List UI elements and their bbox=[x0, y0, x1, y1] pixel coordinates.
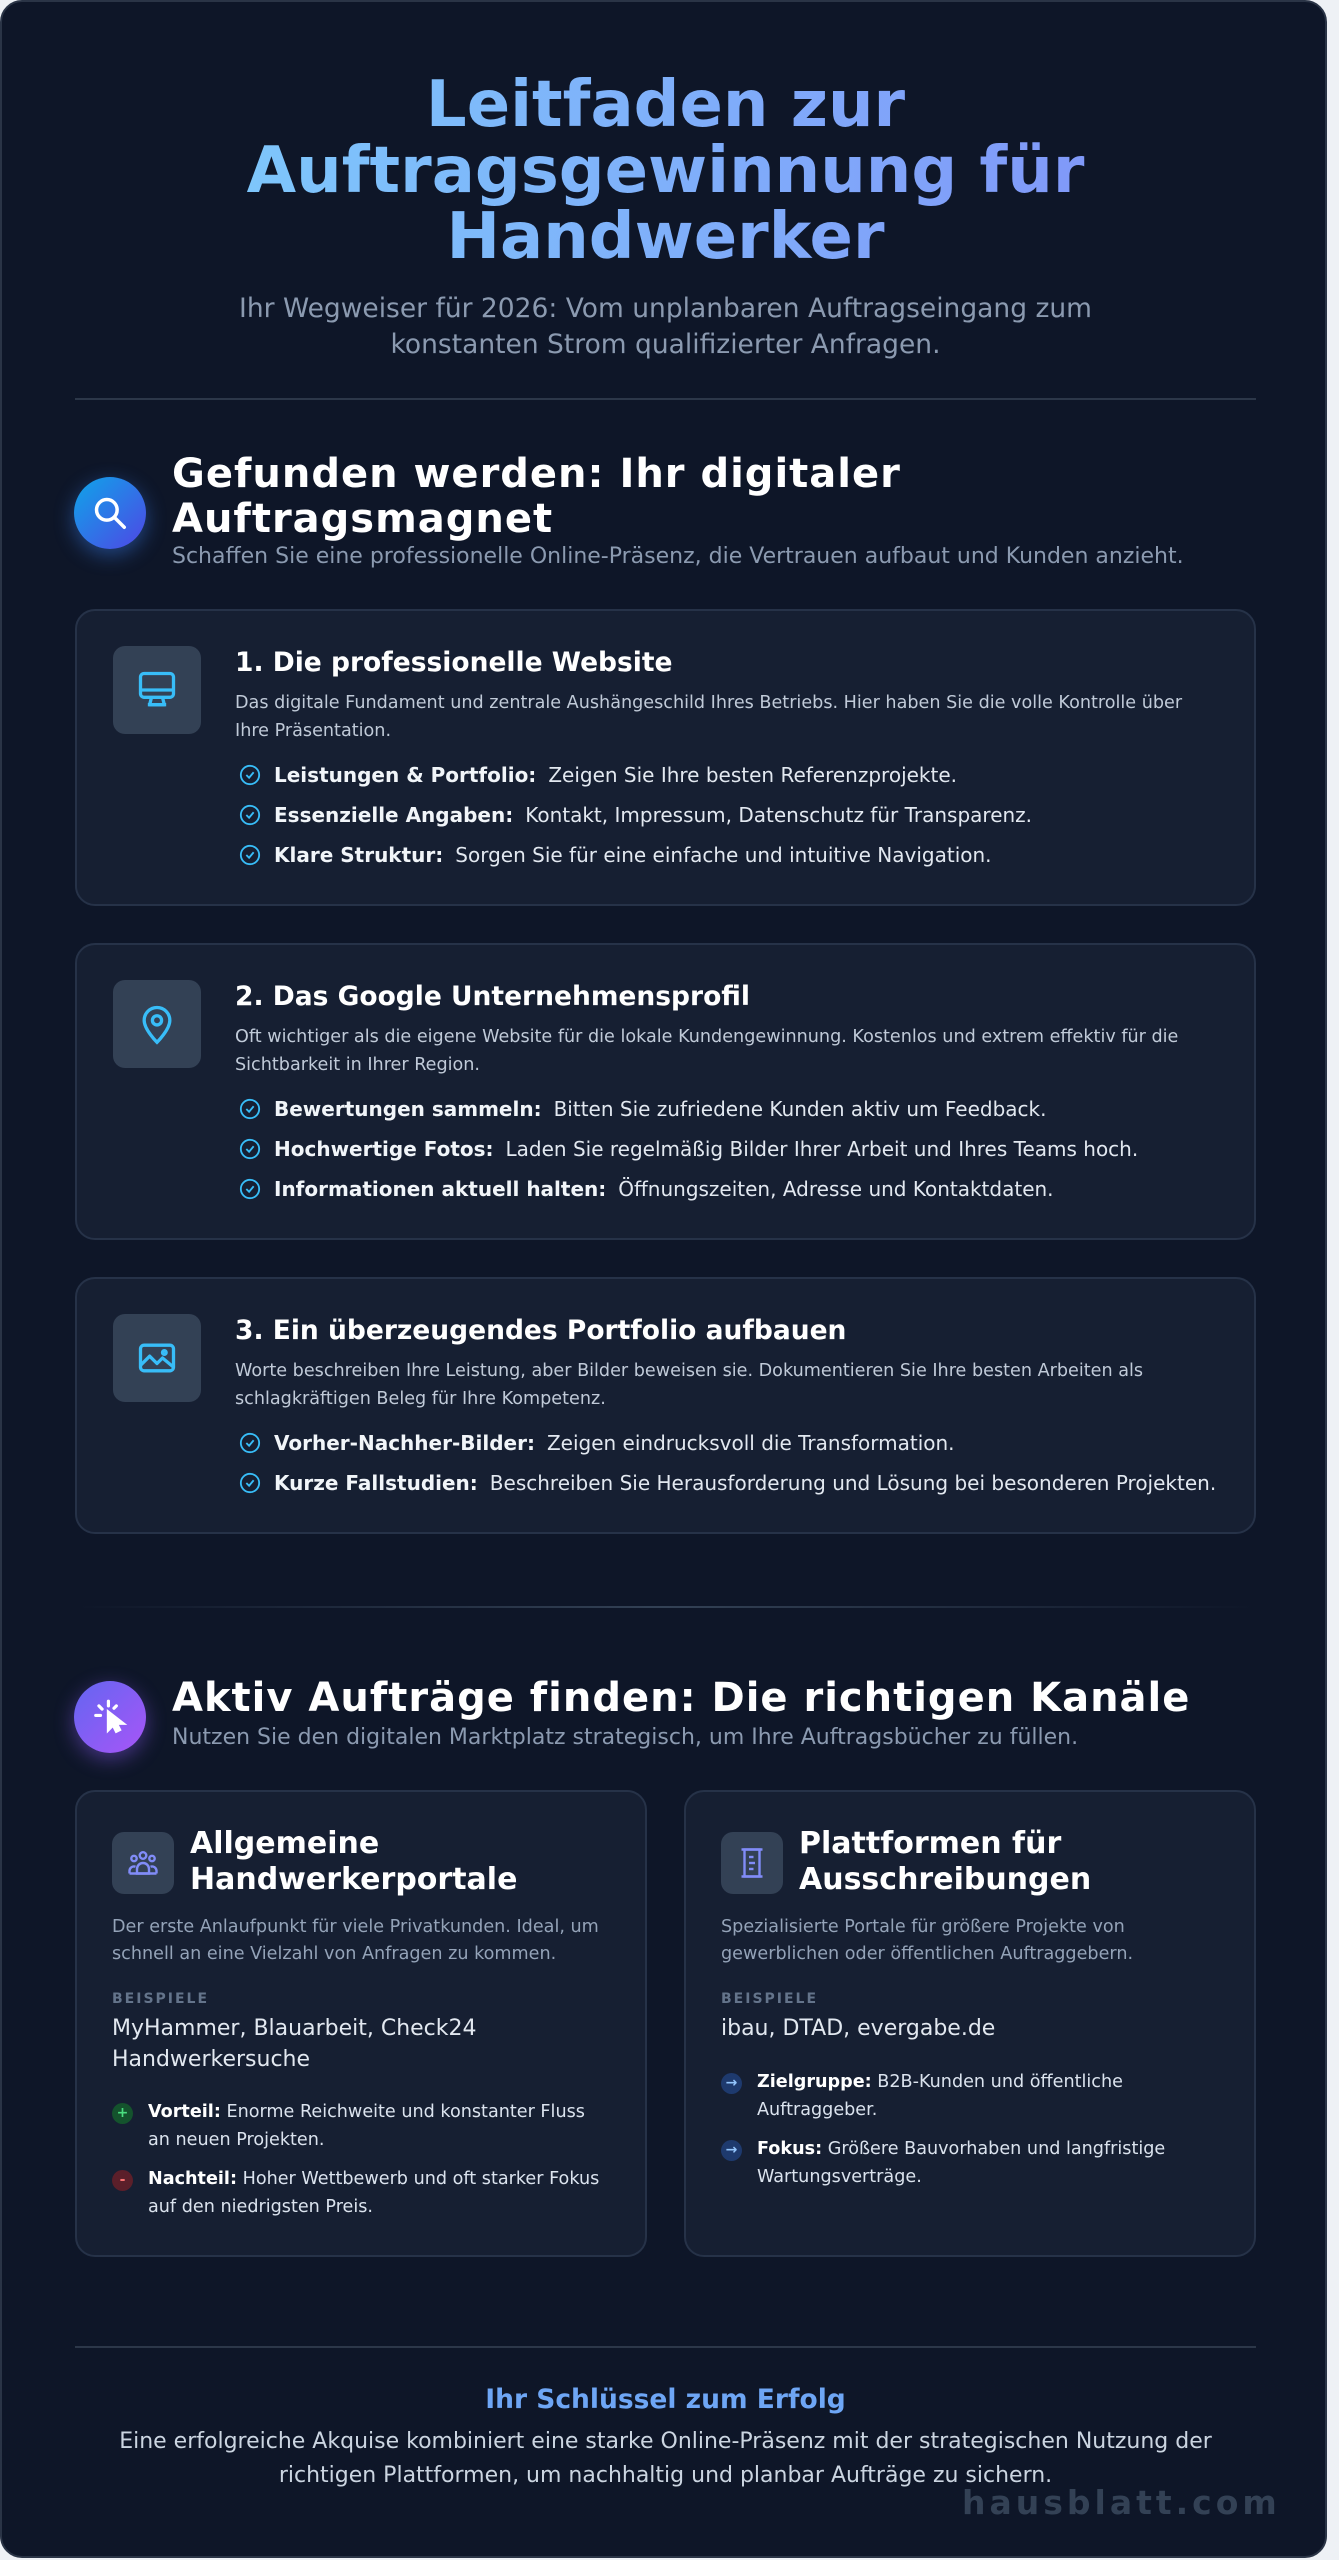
section subtitle 2: Nutzen Sie den digitalen Marktplatz strategisch, um Ihre Auftragsbücher zu füllen. bbox=[172, 1725, 1078, 1750]
bullet list bbox=[240, 1431, 1216, 1495]
examples bbox=[112, 1991, 477, 2072]
card description: Das digitale Fundament und zentrale Aushängeschild Ihres Betriebs. Hier haben Sie die volle Kontrolle über Ihre Präsentation. bbox=[235, 693, 1182, 741]
examples bbox=[721, 1991, 995, 2041]
bullet list: Laden Sie regelmäßig Bilder Ihrer Arbeit und Ihres Teams hoch. bbox=[506, 1137, 1138, 1161]
icon: monitor bbox=[113, 646, 201, 734]
card title: 2. Das Google Unternehmensprofil bbox=[235, 981, 750, 1012]
bullet list: Zeigen Sie Ihre besten Referenzprojekte. bbox=[548, 763, 957, 787]
card title: Allgemeine bbox=[190, 1826, 379, 1861]
title bbox=[2, 72, 1329, 270]
pros and cons bbox=[112, 2102, 599, 2217]
examples: BEISPIELE bbox=[721, 1991, 818, 2007]
bullet list: Kontakt, Impressum, Datenschutz für Transparenz. bbox=[525, 803, 1032, 827]
card description: Oft wichtiger als die eigene Website für die lokale Kundengewinnung. Kostenlos und extrem effektiv für die Sichtbarkeit in Ihrer Region. bbox=[235, 1027, 1178, 1075]
examples: Handwerkersuche bbox=[112, 2047, 310, 2072]
icon: users bbox=[112, 1832, 174, 1894]
panel: ausschreibungen bbox=[684, 1790, 1256, 2257]
details: → bbox=[726, 2075, 737, 2091]
icon: document bbox=[721, 1832, 783, 1894]
card title: 1. Die professionelle Website bbox=[235, 647, 673, 678]
bullet list: Kurze Fallstudien: bbox=[274, 1471, 478, 1495]
card title: Ausschreibungen bbox=[799, 1862, 1091, 1897]
card title bbox=[799, 1826, 1091, 1897]
footer text: Eine erfolgreiche Akquise kombiniert eine starke Online-Präsenz mit der strategischen Nutzung der richtigen Plattformen, um nachhaltig und planbar Aufträge zu sichern. bbox=[119, 2429, 1212, 2488]
bullet list: Hochwertige Fotos: bbox=[274, 1137, 494, 1161]
examples: ibau, DTAD, evergabe.de bbox=[721, 2016, 995, 2041]
card description: Worte beschreiben Ihre Leistung, aber Bilder beweisen sie. Dokumentieren Sie Ihre besten Arbeiten als schlagkräftigen Beleg für Ihre Kompetenz. bbox=[235, 1361, 1143, 1409]
details: → bbox=[726, 2142, 737, 2158]
bullet list: Essenzielle Angaben: bbox=[274, 803, 513, 827]
bullet list: Zeigen eindrucksvoll die Transformation. bbox=[547, 1431, 955, 1455]
panel: google profile bbox=[75, 943, 1256, 1240]
icon: search bbox=[74, 477, 146, 549]
card description: Der erste Anlaufpunkt für viele Privatkunden. Ideal, um schnell an eine Vielzahl von Anfragen zu kommen. bbox=[112, 1917, 599, 1964]
watermark: hausblatt.com bbox=[962, 2483, 1281, 2522]
bullet list: Sorgen Sie für eine einfache und intuitive Navigation. bbox=[455, 843, 992, 867]
details bbox=[721, 2072, 1165, 2187]
pros and cons: + bbox=[117, 2105, 128, 2121]
panel: handwerkerportale bbox=[75, 1790, 647, 2257]
panel: website bbox=[75, 609, 1256, 906]
pros and cons: Vorteil: Enorme Reichweite und konstanter Fluss an neuen Projekten. bbox=[148, 2102, 585, 2150]
bullet list: Bitten Sie zufriedene Kunden aktiv um Feedback. bbox=[554, 1097, 1046, 1121]
title: Leitfaden zur bbox=[426, 68, 905, 142]
title: Handwerker bbox=[446, 200, 885, 274]
section heading 1: Auftragsmagnet bbox=[172, 496, 553, 542]
pros and cons: - bbox=[120, 2172, 125, 2188]
details: Fokus: Größere Bauvorhaben und langfristige Wartungsverträge. bbox=[757, 2139, 1165, 2187]
title: Auftragsgewinnung für bbox=[247, 134, 1084, 208]
bullet list: Bewertungen sammeln: bbox=[274, 1097, 542, 1121]
subtitle: Ihr Wegweiser für 2026: Vom unplanbaren Auftragseingang zum konstanten Strom qualifizierter Anfragen. bbox=[239, 293, 1092, 360]
details: Zielgruppe: B2B-Kunden und öffentliche Auftraggeber. bbox=[757, 2072, 1123, 2120]
icon: map pin bbox=[113, 980, 201, 1068]
card title: Plattformen für bbox=[799, 1826, 1061, 1861]
bullet list: Leistungen & Portfolio: bbox=[274, 763, 536, 787]
examples: MyHammer, Blauarbeit, Check24 bbox=[112, 2016, 477, 2041]
bullet list: Öffnungszeiten, Adresse und Kontaktdaten. bbox=[618, 1177, 1054, 1201]
icon: image bbox=[113, 1314, 201, 1402]
bullet list: Klare Struktur: bbox=[274, 843, 443, 867]
bullet list bbox=[240, 763, 1032, 867]
bullet list: Beschreiben Sie Herausforderung und Lösung bei besonderen Projekten. bbox=[490, 1471, 1216, 1495]
icon: click cursor bbox=[74, 1681, 146, 1753]
examples: BEISPIELE bbox=[112, 1991, 209, 2007]
section heading 1 bbox=[172, 451, 901, 542]
card title: 3. Ein überzeugendes Portfolio aufbauen bbox=[235, 1315, 846, 1346]
card title: Handwerkerportale bbox=[190, 1862, 517, 1897]
section heading 1: Gefunden werden: Ihr digitaler bbox=[172, 451, 901, 497]
section subtitle 1: Schaffen Sie eine professionelle Online-Präsenz, die Vertrauen aufbaut und Kunden anzieht. bbox=[172, 544, 1184, 569]
footer heading: Ihr Schlüssel zum Erfolg bbox=[485, 2384, 846, 2415]
card description: Spezialisierte Portale für größere Projekte von gewerblichen oder öffentlichen Auftraggebern. bbox=[721, 1917, 1133, 1964]
panel: portfolio bbox=[75, 1277, 1256, 1534]
bullet list: Vorher-Nachher-Bilder: bbox=[274, 1431, 535, 1455]
pros and cons: Nachteil: Hoher Wettbewerb und oft starker Fokus auf den niedrigsten Preis. bbox=[148, 2169, 599, 2217]
bullet list bbox=[240, 1097, 1138, 1201]
card title bbox=[190, 1826, 517, 1897]
section heading 2: Aktiv Aufträge finden: Die richtigen Kanäle bbox=[172, 1675, 1190, 1721]
bullet list: Informationen aktuell halten: bbox=[274, 1177, 606, 1201]
